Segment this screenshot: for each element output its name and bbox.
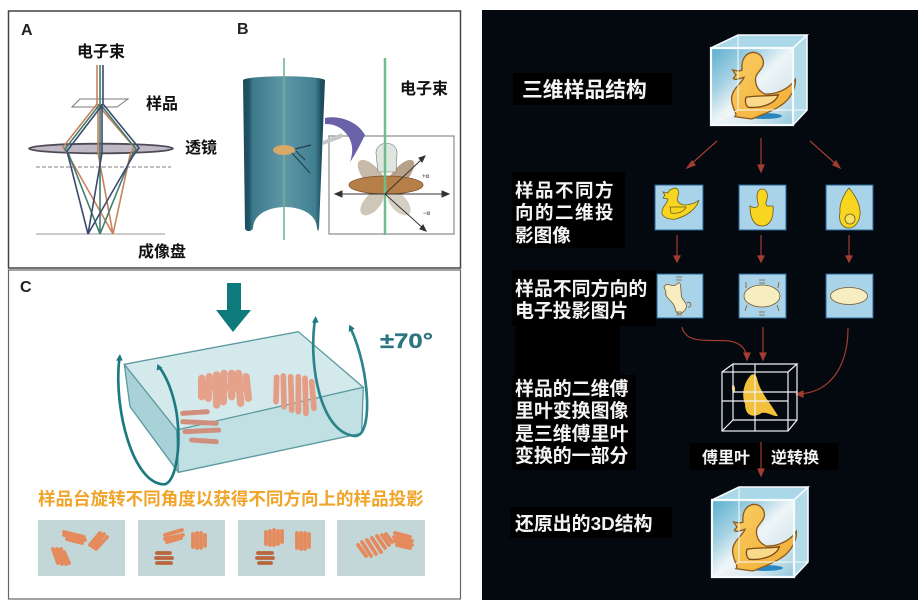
panel: A and B frame (8, 11, 460, 268)
projection: duck side (655, 185, 703, 230)
tilt angle: ±70° (380, 330, 433, 353)
projection 3 (238, 520, 325, 576)
left arrow heads (116, 354, 163, 371)
particle cluster 3 (183, 412, 220, 442)
label: 2D projections: 影图像 (515, 225, 571, 246)
label: electron beam B: 电子束 (400, 80, 448, 98)
label B: B (237, 21, 249, 38)
label: Fourier transform (512, 375, 636, 470)
label: electron projections: 样品不同方向的 (515, 277, 647, 300)
tilt axes (335, 156, 449, 231)
label: electron projections (512, 270, 656, 376)
particle cluster 1 (202, 373, 248, 405)
arrow: inverse transform (758, 442, 764, 476)
column cylinder (243, 76, 325, 231)
-alpha label: −α (423, 211, 431, 217)
arrows: projection to electron image (674, 235, 852, 262)
label: inverse Fourier transform: 逆转换 (771, 448, 819, 467)
particle cluster 2 (276, 376, 314, 413)
panel B: specimen holder (237, 21, 454, 240)
right rotation arrow (313, 320, 367, 436)
electron image 2 (739, 274, 786, 318)
label: electron beam: 电子束 (77, 43, 125, 61)
projection: duck front (739, 185, 786, 230)
sample block (116, 316, 367, 484)
label: inverse Fourier transform (690, 443, 838, 470)
arrows: electron images to Fourier volume (682, 327, 848, 397)
label: inverse Fourier transform: 傅里叶 (702, 448, 750, 467)
arrows: cube to projections (687, 138, 840, 172)
label: Fourier transform: 是三维傅里叶 (515, 423, 628, 445)
icon: reconstructed duck cube (712, 487, 808, 577)
holder rod (323, 133, 342, 145)
label: 3D sample structure (513, 73, 672, 105)
inset box (329, 136, 454, 234)
sample holder tip (273, 145, 311, 173)
label: 2D projections: 向的二维投 (515, 202, 615, 223)
tilted discs (353, 155, 419, 220)
label: Fourier transform: 样品的二维傅 (515, 378, 628, 400)
left rotation arrow (118, 358, 178, 484)
panel C frame (8, 270, 460, 599)
purple curved arrow (325, 117, 365, 162)
label: sample: 样品 (146, 94, 178, 113)
panel A: electron optics (21, 22, 217, 261)
projection 2 (138, 520, 225, 576)
icon: Fourier wireframe volume (722, 364, 797, 431)
label A: A (21, 22, 33, 39)
orange caption: 样品台旋转不同角度以获得不同方向上的样品投影 (38, 489, 424, 509)
label: reconstructed 3D structure (510, 507, 672, 538)
projection 1 (38, 520, 125, 576)
label C: C (20, 279, 32, 296)
ray diagram (63, 65, 139, 234)
label: 2D projections: 样品不同方 (515, 180, 615, 201)
label: imaging plate: 成像盘 (138, 242, 186, 261)
panel: right flowchart background (482, 10, 918, 600)
panel C: tilt series (8, 270, 460, 599)
sample plane (72, 99, 128, 107)
focal dashed line (36, 166, 171, 168)
electron image 3 (826, 274, 873, 318)
label: reconstructed 3D structure: 还原出的3D结构 (515, 513, 652, 535)
electron image 1 (657, 274, 703, 318)
left green axis (283, 58, 285, 240)
label: 2D projections (512, 172, 625, 248)
disc flat (349, 176, 423, 194)
lens (29, 144, 173, 153)
imaging plate line (36, 233, 165, 235)
label: electron projections: 电子投影图片 (515, 300, 628, 322)
label: lens: 透镜 (185, 138, 217, 157)
icon: top duck cube (711, 35, 807, 125)
projection 4 (337, 520, 425, 576)
label: 3D sample structure: 三维样品结构 (522, 79, 647, 102)
projection: duck top (826, 185, 873, 230)
label: Fourier transform: 变换的一部分 (515, 444, 628, 467)
objective lens (376, 143, 397, 172)
right arrow heads (312, 316, 355, 332)
+alpha label: +α (422, 174, 430, 180)
right green axis (384, 58, 386, 235)
beam arrow (216, 283, 251, 332)
label: Fourier transform: 里叶变换图像 (515, 399, 628, 422)
